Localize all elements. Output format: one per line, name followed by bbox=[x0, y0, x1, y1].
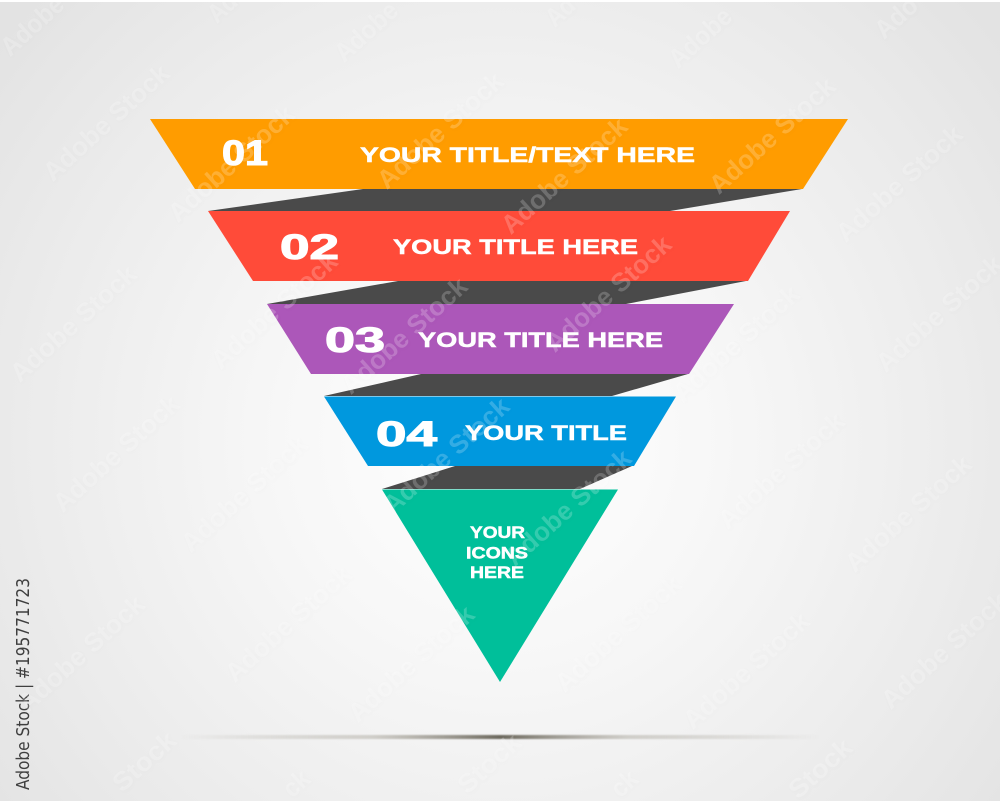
band 5: green triangle: YOUR bbox=[470, 524, 525, 542]
watermarks: Adobe Stock bbox=[205, 246, 343, 375]
watermarks: Adobe Stock bbox=[839, 449, 977, 578]
watermarks: Adobe Stock bbox=[175, 429, 313, 558]
band 1: orange bbox=[150, 119, 848, 189]
band 4: blue: YOUR TITLE bbox=[465, 421, 627, 445]
floor shadow bbox=[180, 735, 820, 739]
band 3: purple bbox=[267, 304, 734, 374]
band 2: red bbox=[208, 211, 790, 281]
watermarks: Adobe Stock bbox=[162, 99, 300, 228]
band 5: green triangle: ICONS bbox=[466, 544, 528, 562]
band 4: blue: 04 bbox=[376, 415, 438, 454]
watermarks: Adobe Stock bbox=[4, 259, 142, 388]
watermarks: ck bbox=[276, 763, 316, 803]
band 3: purple: YOUR TITLE HERE bbox=[418, 328, 663, 352]
band 5: green triangle: HERE bbox=[470, 564, 524, 582]
watermarks: Adobe Stock bbox=[712, 406, 850, 535]
watermarks: Adobe Stock bbox=[37, 58, 175, 187]
watermarks: ck bbox=[604, 763, 644, 803]
band 5: green triangle bbox=[382, 490, 618, 682]
watermarks: Adobe Stock bbox=[539, 229, 677, 358]
watermarks: Adobe Stock bbox=[342, 599, 480, 728]
watermarks: Adobe Stock bbox=[495, 111, 633, 240]
stock id vertical text: Adobe Stock | #195771723 bbox=[13, 578, 34, 790]
watermarks: Stock bbox=[782, 732, 858, 805]
watermarks: Adobe Stock bbox=[219, 559, 357, 688]
watermarks: Adobe Stock bbox=[703, 71, 841, 200]
watermarks: Adobe Stock bbox=[677, 606, 815, 735]
watermarks: Adobe Stock bbox=[47, 389, 185, 518]
watermarks: Adobe Stock bbox=[371, 66, 509, 195]
watermarks: Adobe Stock bbox=[335, 271, 473, 400]
dark connector ribbons bbox=[208, 189, 802, 489]
watermarks: Stock bbox=[451, 727, 527, 800]
watermarks: Stock bbox=[106, 725, 182, 798]
band 3: purple: 03 bbox=[325, 321, 385, 360]
watermarks: Adobe Stock bbox=[377, 391, 515, 520]
band 2: red: YOUR TITLE HERE bbox=[393, 235, 638, 259]
band 1: orange: YOUR TITLE/TEXT HERE bbox=[360, 143, 695, 167]
watermarks: Adobe Stock bbox=[499, 443, 637, 572]
watermarks: Adobe Stock bbox=[12, 589, 150, 718]
band 2: red: 02 bbox=[280, 228, 339, 267]
watermarks: Adobe Stock bbox=[667, 279, 805, 408]
watermarks: Adobe Stock bbox=[830, 119, 968, 248]
band 4: blue bbox=[324, 396, 676, 466]
band 1: orange: 01 bbox=[222, 134, 268, 173]
watermarks: Adobe Stock bbox=[549, 569, 687, 698]
